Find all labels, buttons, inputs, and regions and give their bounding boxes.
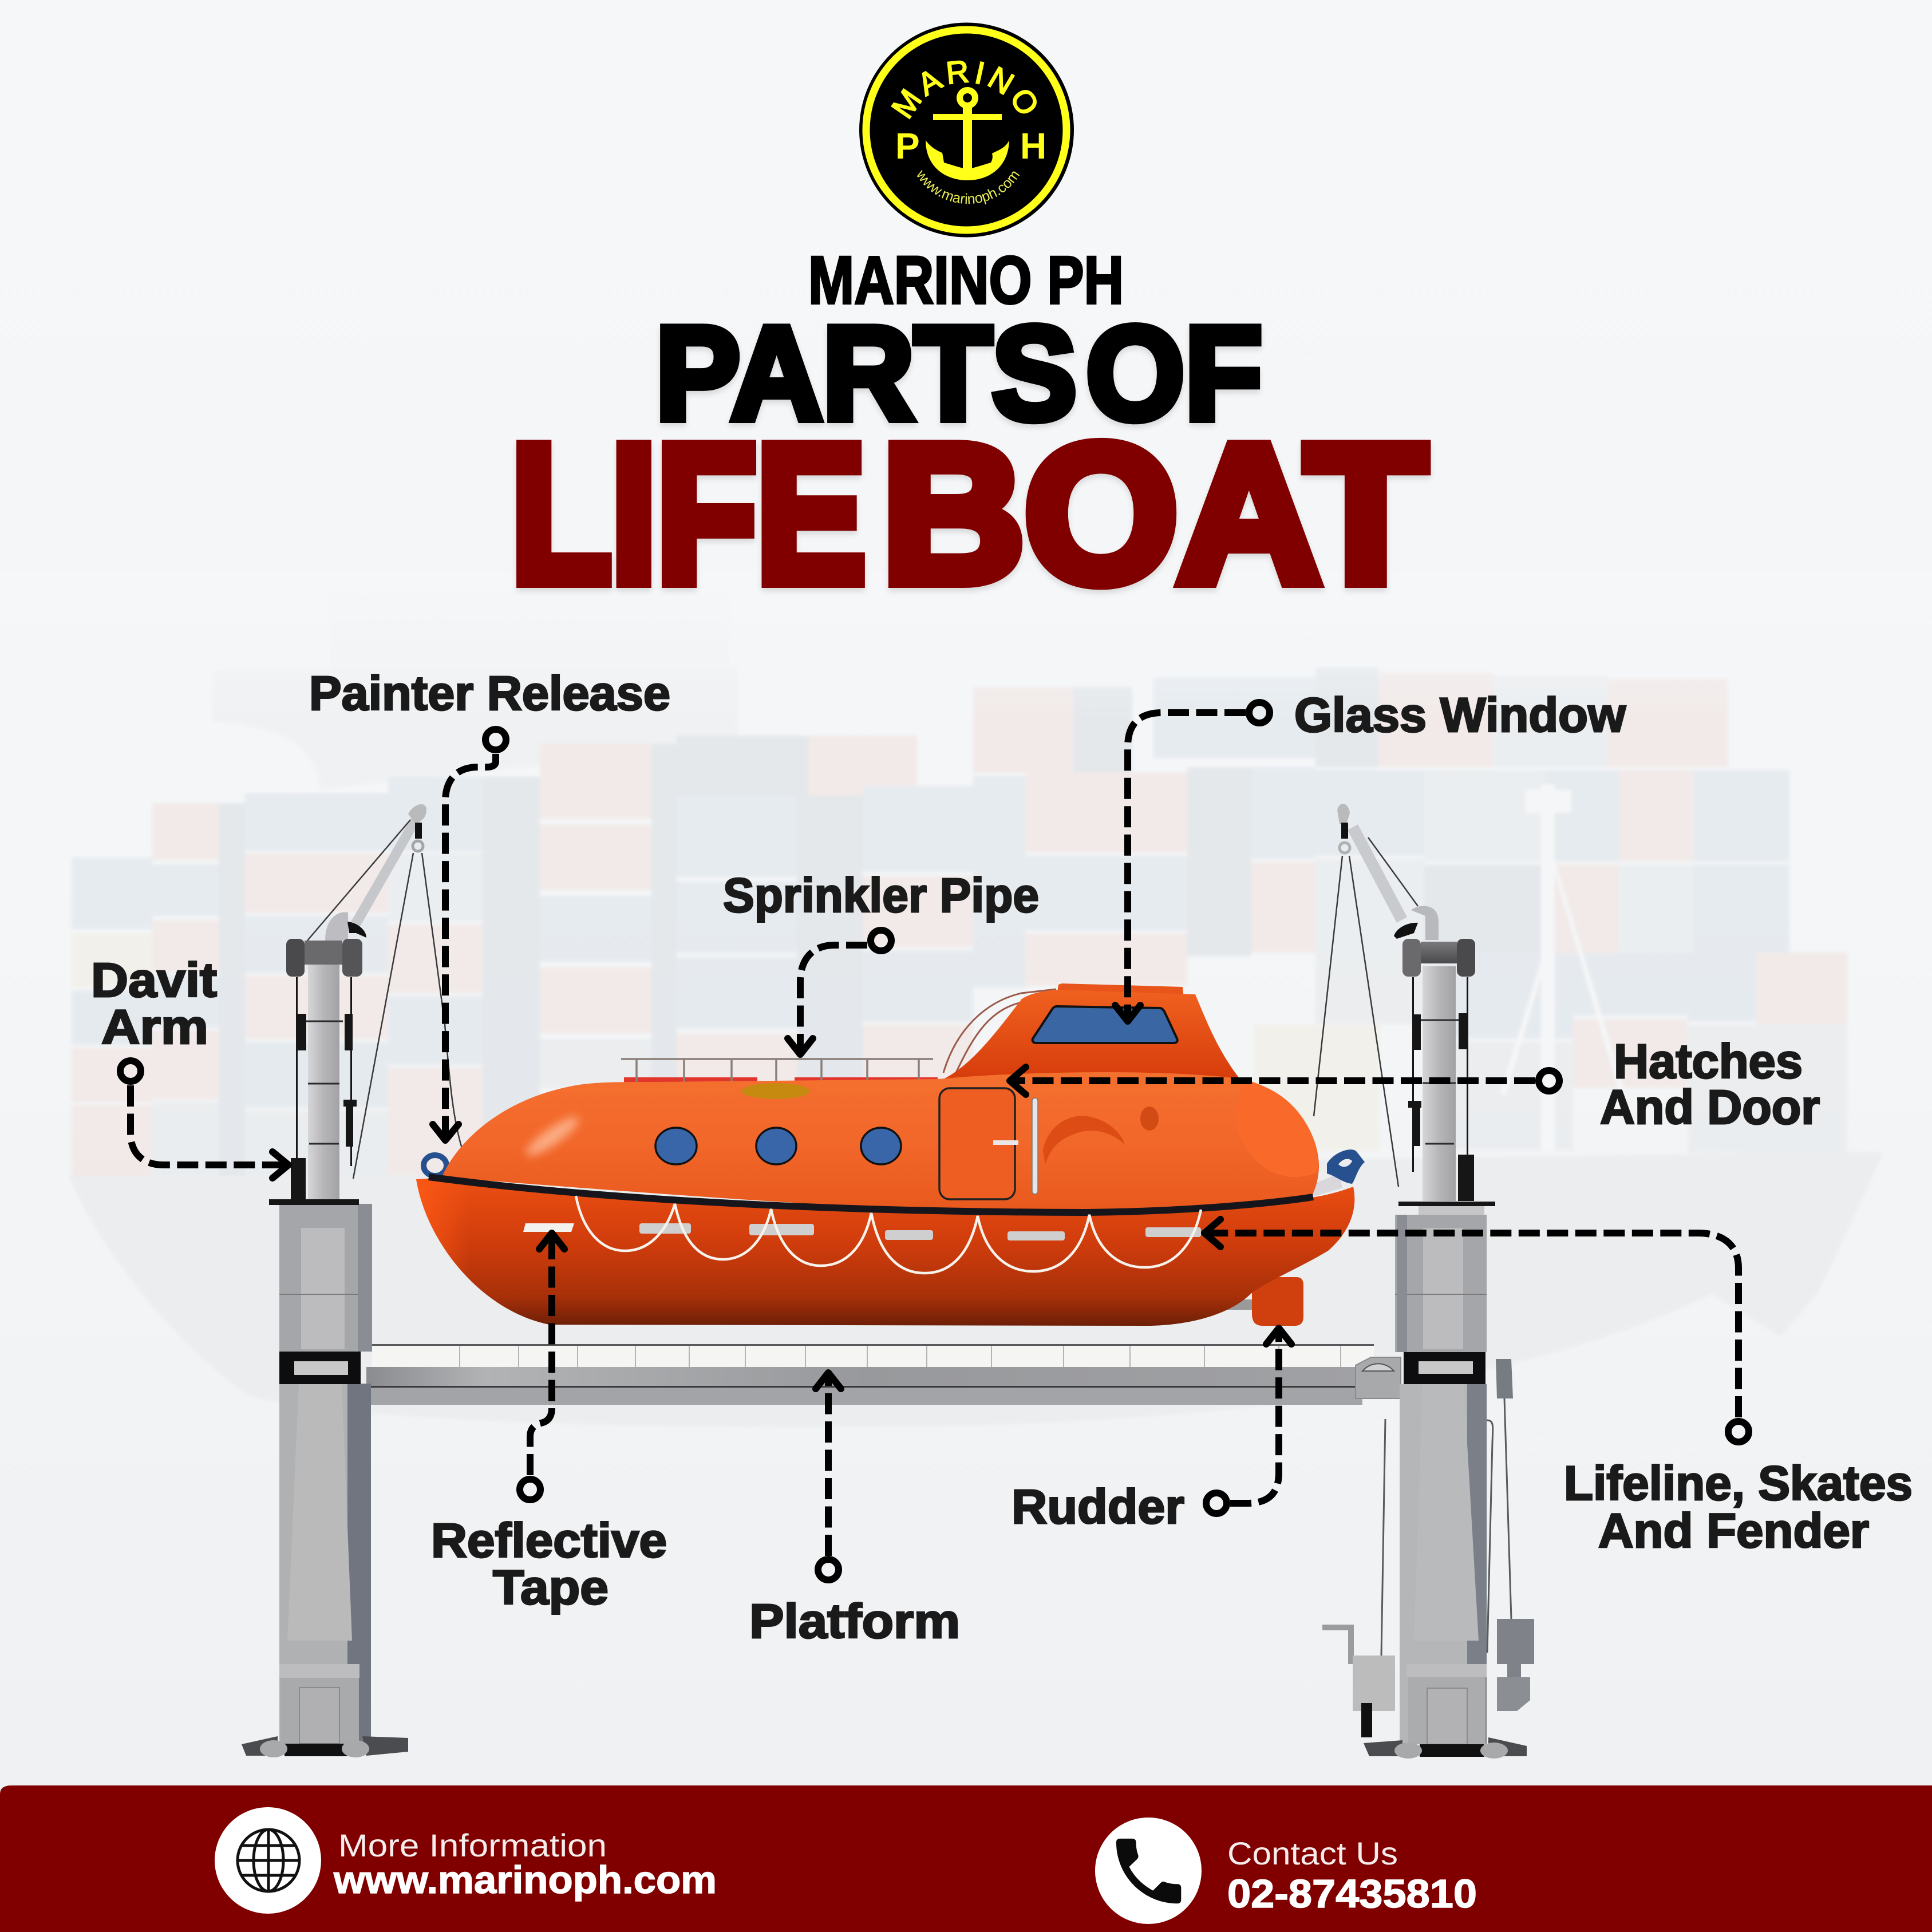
title: PARTS OF: OF	[1086, 299, 1262, 448]
label: Reflective Tape	[431, 1514, 667, 1614]
right collar	[1404, 1351, 1485, 1384]
footer band	[0, 1785, 1932, 1932]
heading: MARINO PH: MARINO PH	[808, 243, 1124, 318]
right wires	[1314, 837, 1418, 1187]
right mid box	[1395, 1215, 1487, 1352]
label: Davit Arm	[91, 953, 217, 1054]
winch crank	[1322, 1625, 1395, 1737]
lower hull	[416, 1178, 1354, 1326]
vent oval	[1140, 1107, 1159, 1131]
railing pads	[624, 1077, 938, 1084]
right tip and ring	[1337, 804, 1350, 853]
door handle	[993, 1140, 1018, 1145]
davit tip and ring	[408, 804, 426, 851]
phone badge	[1095, 1818, 1202, 1924]
logo badge	[859, 23, 1074, 237]
davit head	[286, 939, 362, 977]
deck fender line	[429, 1177, 1313, 1212]
body highlight	[522, 1112, 583, 1161]
text: more information: www.marinoph.com	[333, 1858, 717, 1902]
beam upper	[366, 1367, 1362, 1386]
rudder	[1252, 1277, 1303, 1326]
right lower column	[1400, 1384, 1487, 1744]
right rods and actuators	[1398, 977, 1495, 1206]
blue fender left	[424, 1155, 447, 1176]
top fade over ship	[0, 572, 1932, 721]
lifeboat	[416, 983, 1365, 1326]
white inner deck right	[1311, 1174, 1342, 1196]
side wires	[1381, 1398, 1511, 1656]
water wake	[1288, 1414, 1717, 1460]
rail panels	[372, 1344, 1374, 1368]
yellow ring	[866, 30, 1066, 230]
connector: Lifeline, Skates And Fender	[1204, 1219, 1749, 1442]
right upper column	[1421, 966, 1459, 1201]
upper body	[441, 1072, 1319, 1214]
label: Glass Window: Glass Window	[1294, 688, 1626, 742]
connector: Painter Release	[433, 729, 506, 1140]
glass window	[1033, 1006, 1178, 1043]
door	[939, 1088, 1015, 1199]
side gear box	[1496, 1359, 1534, 1711]
text: contact us	[1227, 1835, 1477, 1916]
portholes	[655, 1128, 901, 1164]
right davit tower	[1314, 804, 1534, 1759]
rudder shaft	[1198, 1299, 1252, 1310]
centre container stacks	[540, 687, 1187, 1088]
right elbow	[1411, 906, 1439, 940]
text: contact us: Contact Us	[1227, 1835, 1398, 1871]
label: Lifeline, Skates And Fender: And Fender	[1598, 1504, 1869, 1558]
right head	[1402, 939, 1475, 977]
text: contact us: 02-87435810	[1227, 1871, 1477, 1916]
icon: phone handset	[1116, 1839, 1181, 1903]
davit collar	[279, 1351, 361, 1384]
bridge superstructure	[212, 667, 738, 790]
text: more information	[333, 1827, 717, 1902]
badge disc	[859, 23, 1074, 237]
davit elbow	[325, 912, 348, 941]
ship mast	[1500, 784, 1626, 1151]
davit lower column	[279, 1384, 371, 1745]
label: Reflective Tape: Reflective	[431, 1514, 667, 1567]
left container stacks	[72, 777, 540, 1176]
anchor icon	[926, 87, 1009, 180]
blue fender right	[1327, 1149, 1365, 1184]
lower hull left glow	[416, 1178, 630, 1325]
davit upper column	[305, 964, 343, 1200]
title: LIFE BOAT: BOAT	[882, 405, 1426, 623]
davit rods and actuators	[269, 977, 359, 1205]
right container stacks	[1153, 667, 1847, 1153]
left davit tower	[242, 804, 462, 1757]
right box base	[1364, 1664, 1527, 1759]
davit arm	[350, 808, 422, 927]
ship hull	[68, 1152, 1884, 1427]
boat wires to cabin	[943, 989, 1056, 1073]
title: LIFE BOAT	[511, 405, 1426, 623]
davit box base	[242, 1664, 408, 1757]
label: Rudder: Rudder	[1012, 1480, 1184, 1534]
beam lower	[366, 1388, 1362, 1405]
label: Hatches And Door	[1600, 1034, 1820, 1134]
badge website text: www.marinoph.com	[917, 170, 1020, 205]
davit wires	[307, 820, 462, 1179]
badge text MARINO: MARINO	[891, 61, 1037, 119]
cabin	[943, 990, 1242, 1082]
title: LIFE BOAT: LIFE	[511, 405, 866, 623]
label: Reflective Tape: Tape	[493, 1560, 609, 1614]
label: Davit Arm: Arm	[101, 1000, 208, 1054]
curved fin	[1043, 1116, 1125, 1165]
text: more information: More Information	[338, 1827, 607, 1863]
footer background	[0, 1785, 1932, 1932]
label: Lifeline, Skates And Fender	[1564, 1456, 1913, 1558]
label: Lifeline, Skates And Fender: Lifeline, Skates	[1564, 1456, 1913, 1510]
davit mid box	[279, 1204, 372, 1352]
connector: Davit Arm	[120, 1061, 289, 1178]
label: Sprinkler Pipe: Sprinkler Pipe	[723, 868, 1039, 922]
label: Painter Release: Painter Release	[309, 666, 670, 720]
badge letter P: P	[895, 125, 920, 167]
connector: Glass Window	[1115, 702, 1270, 1021]
label: Hatches And Door: Hatches	[1614, 1034, 1803, 1088]
label: Platform: Platform	[749, 1594, 960, 1648]
globe badge	[215, 1807, 321, 1914]
grab rail	[1032, 1098, 1038, 1194]
bow bulge	[1236, 1081, 1318, 1177]
davit saddle	[347, 922, 366, 938]
connector: Rudder	[1206, 1328, 1291, 1514]
platform beam with rail	[366, 1344, 1401, 1405]
connector: Sprinkler Pipe	[788, 930, 891, 1054]
reflective strips	[523, 1223, 1201, 1240]
icon: globe	[238, 1830, 299, 1891]
right saddle	[1394, 923, 1418, 939]
hatch top	[1056, 983, 1184, 999]
connector: Hatches And Door	[1010, 1067, 1559, 1095]
right arm	[1348, 824, 1407, 923]
sprinkler pipe	[621, 1059, 933, 1083]
label: Davit Arm: Davit	[91, 953, 217, 1007]
background: faded container ship	[68, 595, 1884, 1460]
connector: Reflective Tape	[520, 1233, 564, 1500]
lifelines	[576, 1196, 1201, 1273]
badge letter H: H	[1020, 125, 1046, 167]
yellow patch	[741, 1083, 810, 1099]
connector: Platform	[816, 1373, 841, 1580]
upper bridge	[329, 595, 730, 670]
label: Hatches And Door: And Door	[1600, 1080, 1820, 1134]
title: PARTS OF: PARTS	[655, 299, 1077, 448]
beam joint	[1356, 1357, 1401, 1398]
